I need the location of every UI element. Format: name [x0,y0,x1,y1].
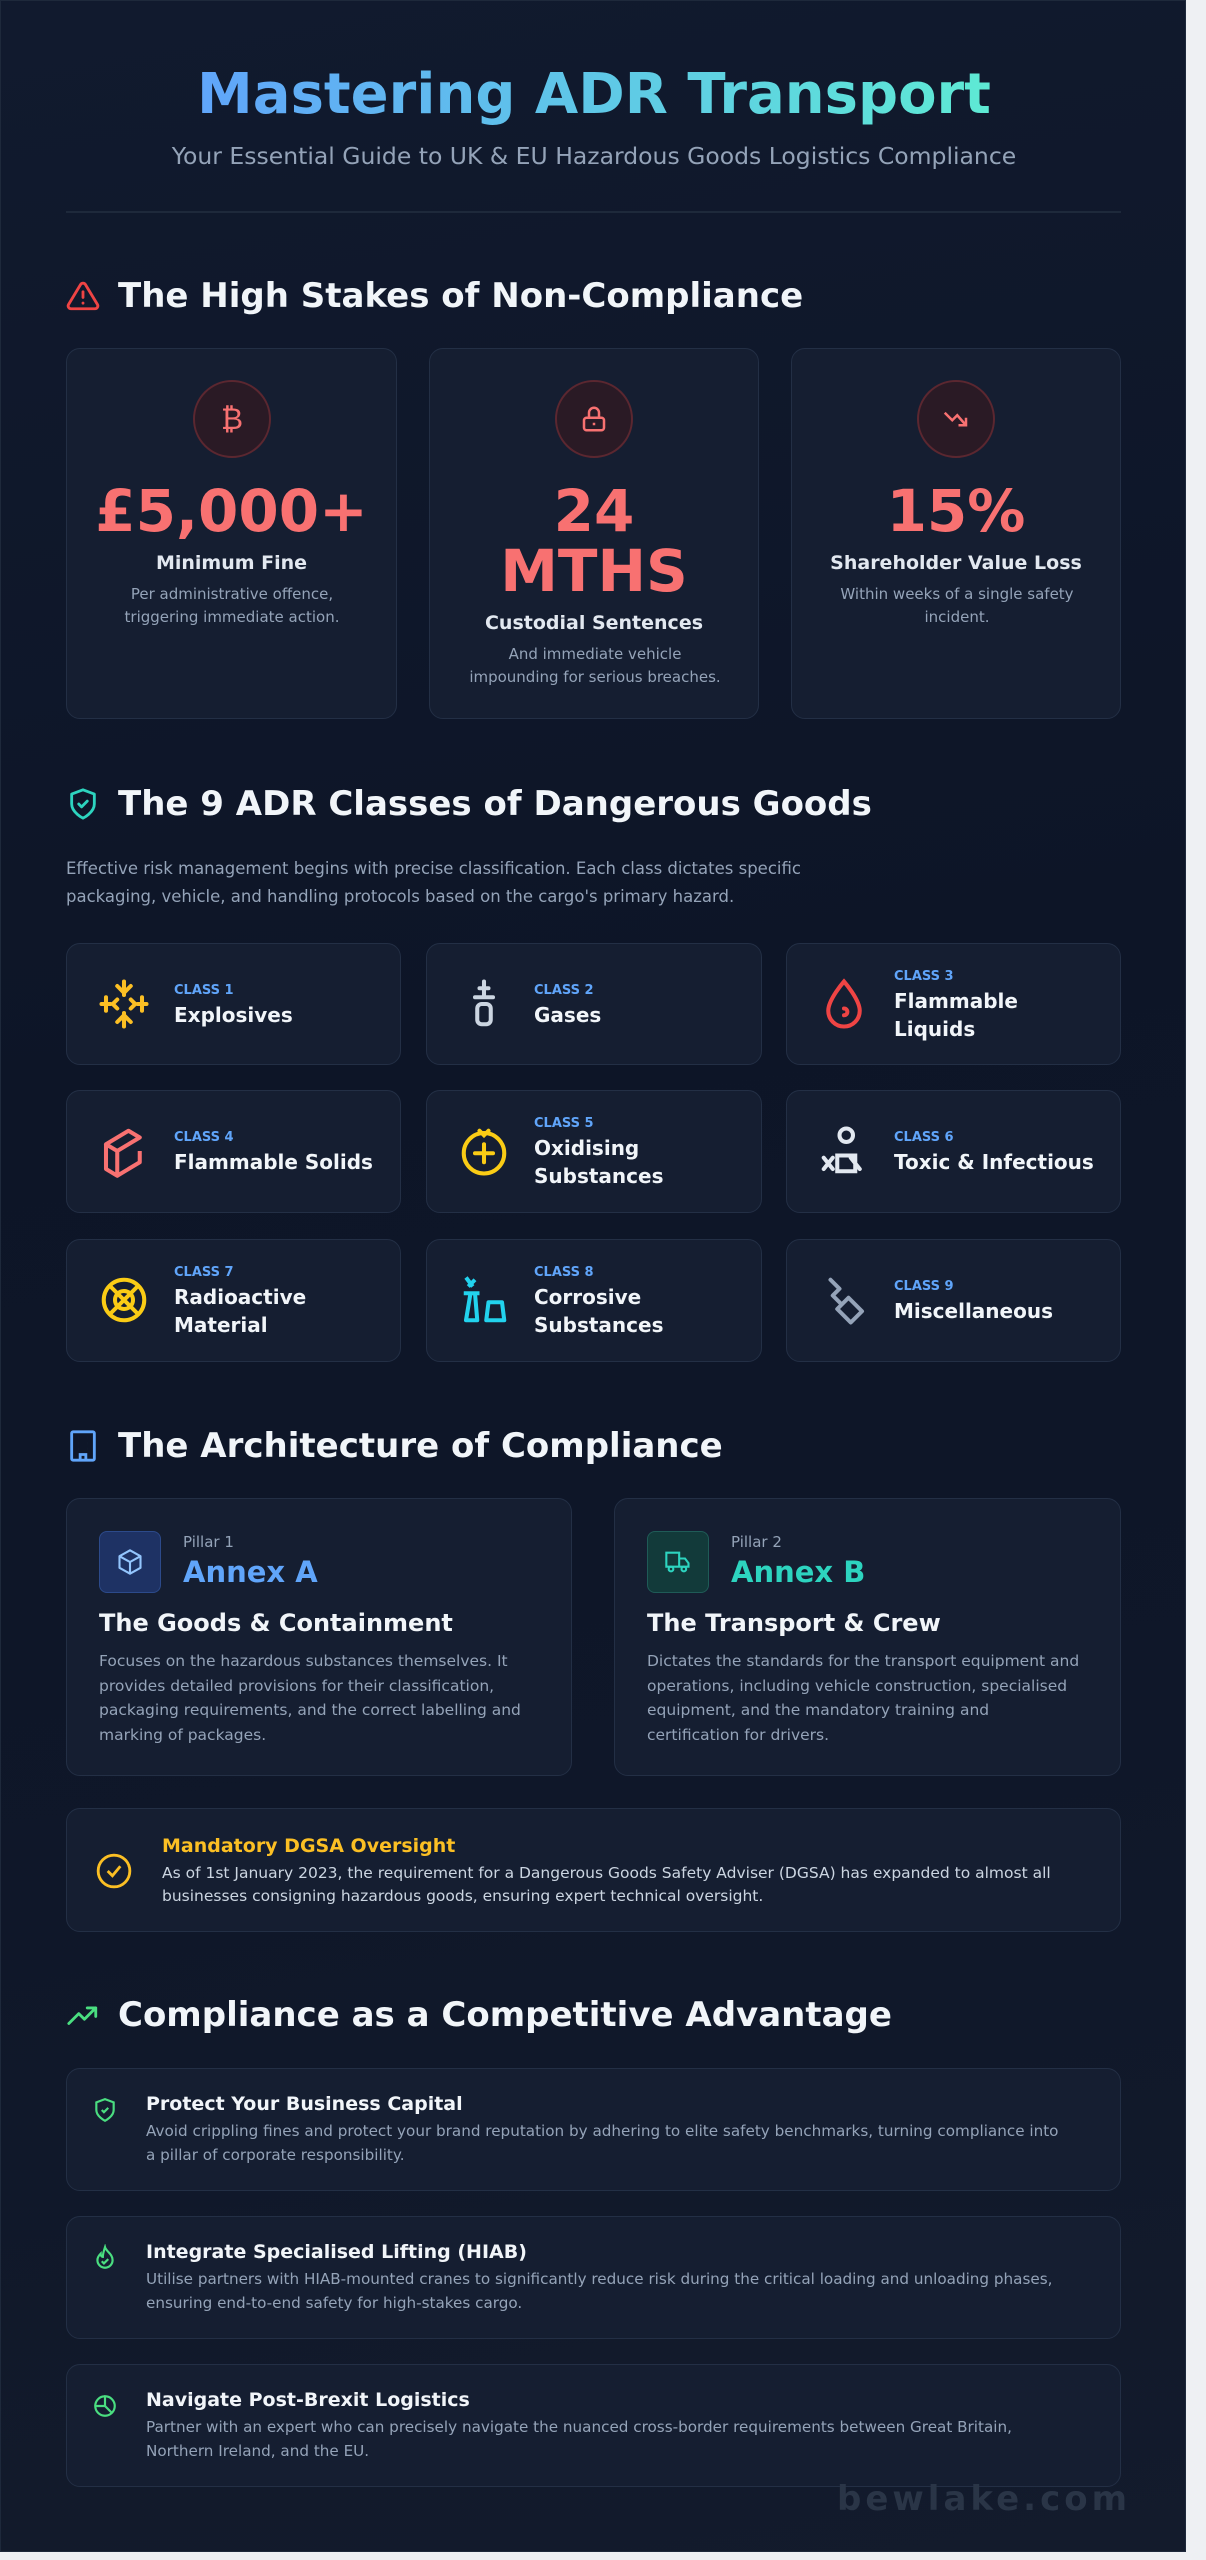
panel: brexit: Navigate Post-Brexit Logistics [146,2389,470,2411]
description: Within weeks of a single safety incident. [840,585,1074,626]
callout: DGSA: Mandatory DGSA Oversight [162,1835,455,1857]
panel: brexit [66,2364,1121,2487]
callout: DGSA [66,1808,1121,1932]
class 5: Oxidising [534,1136,639,1160]
label: Custodial Sentences [485,612,703,634]
class 9: Miscellaneous [894,1299,1053,1323]
description [469,645,721,686]
label: Shareholder Value Loss [830,552,1082,574]
class 4: CLASS 4 [174,1130,234,1145]
panel: annex A: Pillar 1 [183,1533,234,1551]
annex title: Annex A [183,1555,318,1589]
class 1: CLASS 1 [174,983,234,998]
panel: annex B [614,1498,1121,1776]
class 7: Material [174,1313,268,1337]
description: Focuses on the hazardous substances themselves. It provides detailed provisions for their classification, packaging requirements, and the correct labelling and marking of packages. [99,1652,521,1744]
description: equipment, and the mandatory training and [647,1701,989,1719]
class 6: Toxic & Infectious [894,1150,1094,1174]
title: Mastering ADR Transport [197,62,991,127]
heading: high stakes: The High Stakes of Non-Compliance [118,276,803,316]
class 8: Corrosive [534,1285,641,1309]
icon: pound: ₿ [221,402,243,436]
class 2: CLASS 2 [534,983,594,998]
class 8: CLASS 8 [534,1265,594,1280]
label: Minimum Fine [156,552,307,574]
class 9: CLASS 9 [894,1279,954,1294]
icon: trending down [917,380,995,458]
annex title: Annex B [731,1555,865,1589]
class 3: Flammable [894,989,1018,1013]
intro text: Effective risk management begins with precise classification. Each class dictates specific packaging, vehicle, and handling protocols based on the cargo's primary hazard. [66,859,801,906]
icon: pound [193,380,271,458]
heading: 9 classes: The 9 ADR Classes of Dangerous Goods [118,784,872,824]
class 9 [786,1239,1121,1362]
panel: shareholder [791,348,1121,719]
heading: advantage: Compliance as a Competitive Advantage [118,1995,892,2035]
icon: trending up [67,2006,98,2025]
description [647,1652,1079,1744]
panel: annex A [66,1498,572,1776]
class 5: CLASS 5 [534,1116,594,1131]
number: 15% [887,477,1025,545]
class 3 [786,943,1121,1065]
description: Dictates the standards for the transport equipment and [647,1652,1079,1670]
class 1: Explosives [174,1003,293,1027]
subheading: The Goods & Containment [99,1609,453,1637]
panel: protect: Avoid crippling fines and protect your brand reputation by adhering to elite safety benchmarks, turning compliance into [146,2122,1058,2140]
class 2 [426,943,762,1065]
class 4: Flammable Solids [174,1150,373,1174]
icon: truck [647,1531,709,1593]
class 3: CLASS 3 [894,969,954,984]
panel: brexit: Northern Ireland, and the EU. [146,2442,369,2460]
class 5: Substances [534,1164,663,1188]
callout: DGSA: As of 1st January 2023, the requirement for a Dangerous Goods Safety Adviser (DGSA) has expanded to almost all businesses consigning hazardous goods, ensuring expert technical oversight. [162,1864,1051,1905]
watermark: bewlake.com [837,2479,1131,2519]
class 1 [66,943,401,1065]
number: £5,000+ [95,477,368,545]
description: And immediate vehicle [509,645,681,663]
description: certification for drivers. [647,1726,829,1744]
description: Per administrative offence, triggering immediate action. [125,585,339,626]
number: 24 [554,477,634,545]
class 4 [66,1090,401,1213]
panel: protect [66,2068,1121,2191]
number: MTHS [500,537,688,605]
panel: annex B: Pillar 2 [731,1533,782,1551]
panel: protect: a pillar of corporate responsibility. [146,2146,405,2164]
panel: custodial [429,348,759,719]
panel: protect: Protect Your Business Capital [146,2093,463,2115]
class 8 [426,1239,762,1362]
class 6: CLASS 6 [894,1130,954,1145]
panel: brexit: Partner with an expert who can precisely navigate the nuanced cross-border requirements between Great Britain, [146,2418,1012,2436]
class 7: Radioactive [174,1285,306,1309]
panel: HIAB: Integrate Specialised Lifting (HIAB) [146,2241,527,2263]
heading: architecture: The Architecture of Compliance [118,1426,723,1466]
subtitle: Your Essential Guide to UK & EU Hazardous Goods Logistics Compliance [172,142,1016,170]
description: operations, including vehicle construction, specialised [647,1676,1067,1694]
class 7 [66,1239,401,1362]
panel: HIAB [66,2216,1121,2339]
description: impounding for serious breaches. [469,668,721,686]
icon: warning [66,282,100,310]
class 5 [426,1090,762,1213]
icon: check circle [96,1854,132,1888]
class 7: CLASS 7 [174,1265,234,1280]
panel: fine [66,348,397,719]
class 2: Gases [534,1003,601,1027]
icon: lock [555,380,633,458]
class 8: Substances [534,1313,663,1337]
icon: building [70,1430,96,1462]
icon: shield [70,788,96,820]
icon: box [99,1531,161,1593]
panel: HIAB: Utilise partners with HIAB-mounted cranes to significantly reduce risk during the critical loading and unloading phases, ensuring end-to-end safety for high-stakes cargo. [146,2270,1052,2312]
class 3: Liquids [894,1017,975,1041]
number [500,477,688,605]
class grid [66,943,1121,1362]
class 6 [786,1090,1121,1213]
subheading: The Transport & Crew [647,1609,941,1637]
